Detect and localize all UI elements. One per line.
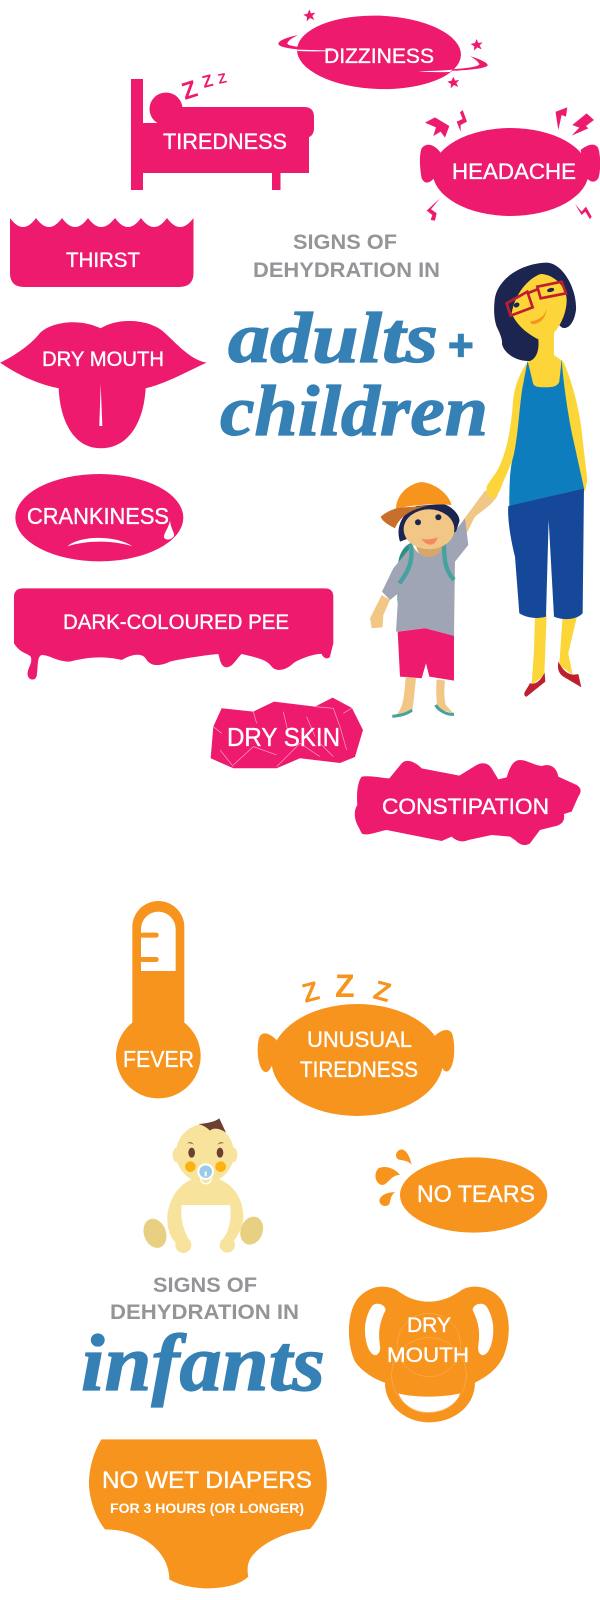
raised arm xyxy=(463,491,498,537)
mouth xyxy=(421,537,438,545)
label line: DRY xyxy=(407,1314,451,1337)
icon: oval with frown and tear xyxy=(15,474,183,561)
baby eyes xyxy=(187,1142,224,1158)
icon: cracked skin patch xyxy=(211,698,363,768)
heading line: DEHYDRATION IN xyxy=(110,1300,299,1324)
eyes xyxy=(415,514,441,525)
label: no tears: NO TEARS xyxy=(417,1181,535,1208)
icon: head with lightning bolts xyxy=(420,107,600,221)
pacifier xyxy=(198,1164,213,1184)
illustration: child xyxy=(370,482,498,716)
icon: dripping banner xyxy=(14,588,333,680)
capri pants xyxy=(508,488,584,619)
child legs and sandals xyxy=(392,677,454,716)
heading line: SIGNS OF xyxy=(293,231,397,254)
eyes xyxy=(513,287,555,309)
label line: UNUSUAL xyxy=(307,1027,412,1052)
heading line: DEHYDRATION IN xyxy=(253,259,440,282)
panel: dark-coloured pee xyxy=(14,588,333,680)
label: dry skin: DRY SKIN xyxy=(227,722,340,752)
hat crown xyxy=(396,482,452,508)
script word: children: children xyxy=(220,371,488,451)
baby hands xyxy=(175,1237,235,1253)
shirt xyxy=(382,518,468,637)
panel: constipation xyxy=(355,760,581,845)
baby cheeks xyxy=(185,1161,226,1172)
label: constipation: CONSTIPATION xyxy=(382,794,549,819)
smile xyxy=(530,308,547,324)
tank top xyxy=(509,359,584,506)
heading: signs of dehydration in infants xyxy=(81,1273,325,1408)
icon: sleeping z letters: Z xyxy=(370,975,394,1008)
plus sign: + xyxy=(448,321,474,370)
icon: water with waves xyxy=(10,218,194,287)
label: fever: FEVER xyxy=(123,1046,194,1072)
shorts xyxy=(398,628,454,681)
panel: tiredness xyxy=(131,69,314,190)
panel: crankiness xyxy=(15,474,183,561)
icon: lumpy shape xyxy=(355,760,581,845)
label line: MOUTH xyxy=(387,1344,469,1367)
icon: sleeping z letters xyxy=(179,69,228,106)
panel: dry mouth xyxy=(0,321,207,448)
baby feet xyxy=(140,1213,267,1251)
sub-label: duration: FOR 3 HOURS (OR LONGER) xyxy=(110,1500,304,1516)
baby body and arms xyxy=(167,1177,243,1243)
panel: dry skin xyxy=(211,698,363,768)
lowered arm xyxy=(370,595,390,628)
face xyxy=(404,509,454,549)
icon: head oval xyxy=(258,1004,454,1116)
label: no wet diapers: NO WET DIAPERS xyxy=(102,1467,312,1494)
illustration: mother xyxy=(487,263,587,697)
panel: thirst xyxy=(10,218,194,287)
backpack xyxy=(397,543,413,603)
hair xyxy=(399,504,459,542)
icon: sleeping z letters: Z xyxy=(299,976,322,1009)
icon: sleeping z letters: Z xyxy=(216,69,228,87)
panel: unusual tiredness xyxy=(258,968,454,1116)
icon: bed with sleeper xyxy=(131,79,314,190)
heading line: SIGNS OF xyxy=(153,1273,257,1297)
baby head xyxy=(173,1124,237,1183)
icon: dizzy oval with orbit and stars xyxy=(278,9,488,92)
label: dry mouth: DRY MOUTH xyxy=(42,348,164,371)
icon: sleeping z letters: Z xyxy=(335,968,355,1004)
icon: diaper xyxy=(89,1439,327,1588)
script word: infants: infants xyxy=(81,1320,325,1408)
hat brim xyxy=(381,506,427,528)
face xyxy=(512,274,567,339)
icon: lips and tongue xyxy=(0,321,207,448)
panel: no tears xyxy=(375,1149,547,1233)
label: dizziness: DIZZINESS xyxy=(324,45,434,68)
mother body xyxy=(487,330,587,685)
hair back xyxy=(494,263,576,361)
label line: TIREDNESS xyxy=(300,1057,418,1082)
mother hand xyxy=(487,482,498,499)
script word: adults: adults xyxy=(228,298,438,378)
label: dark-coloured pee: DARK-COLOURED PEE xyxy=(63,610,289,634)
panel: dry mouth infants xyxy=(349,1287,509,1422)
panel: fever xyxy=(116,901,201,1098)
heading: signs of dehydration in adults and children xyxy=(220,231,488,451)
icon: sleeping z letters: Z xyxy=(179,75,201,106)
label: thirst: THIRST xyxy=(66,248,140,272)
panel: no wet diapers xyxy=(89,1439,327,1588)
label: tiredness: TIREDNESS xyxy=(163,129,287,154)
icon: pacifier xyxy=(349,1287,509,1422)
straps xyxy=(399,542,454,583)
illustration: baby xyxy=(140,1118,267,1253)
panel: dizziness xyxy=(278,9,488,92)
panel: headache xyxy=(420,107,600,221)
icon: thermometer xyxy=(116,901,201,1098)
icon: sleeping z letters xyxy=(299,968,394,1009)
glasses xyxy=(507,282,566,316)
child upper body xyxy=(370,482,498,681)
shoes xyxy=(524,662,581,697)
label: crankiness: CRANKINESS xyxy=(27,503,169,529)
icon: oval with water drops xyxy=(375,1149,547,1233)
neck xyxy=(415,543,445,562)
label: headache: HEADACHE xyxy=(452,159,576,184)
baby hair xyxy=(198,1118,226,1133)
icon: sleeping z letters: Z xyxy=(200,71,215,92)
